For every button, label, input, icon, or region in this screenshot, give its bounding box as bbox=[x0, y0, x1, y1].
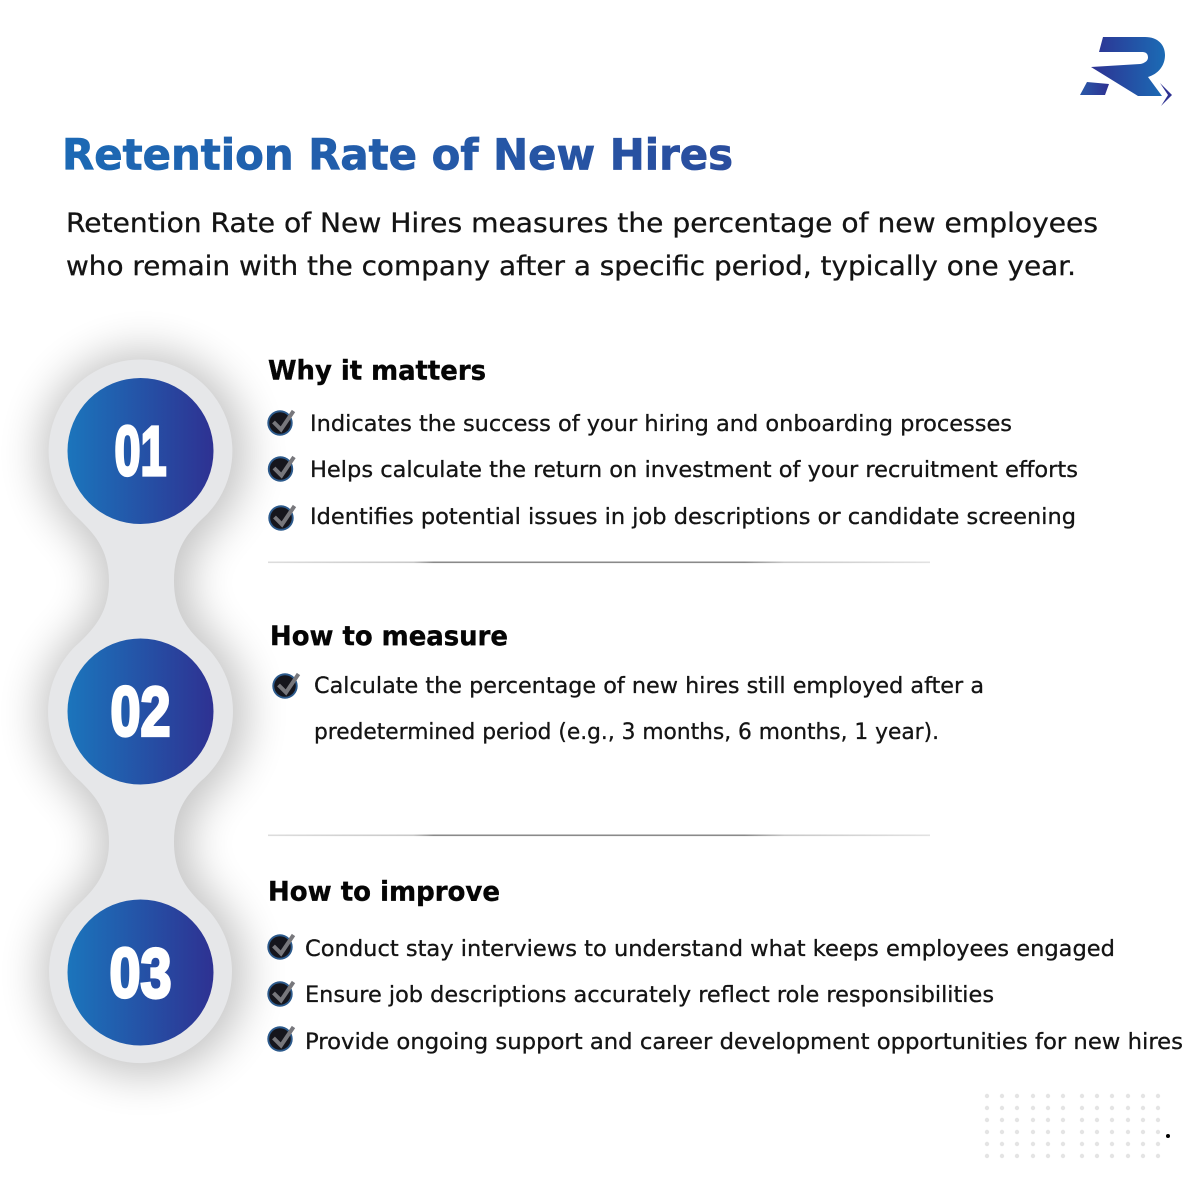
check icon 3 bbox=[268, 505, 294, 531]
numbered timeline bbox=[48, 359, 236, 1065]
list item 3: Provide ongoing support and career development opportunities for new hires bbox=[305, 1029, 1183, 1055]
description: who remain with the company after a specific period, typically one year. bbox=[66, 251, 1076, 282]
badge 02: 02 bbox=[110, 672, 170, 750]
badge 03: 03 bbox=[110, 934, 172, 1012]
list item 2: Ensure job descriptions accurately reflect role responsibilities bbox=[305, 982, 994, 1008]
check icon 1 bbox=[267, 410, 294, 436]
badge 02 bbox=[68, 638, 214, 784]
badge 01: 01 bbox=[114, 412, 166, 490]
check icon 2 bbox=[268, 456, 294, 482]
dot pattern bbox=[985, 1094, 1160, 1158]
heading: how to improve: How to improve bbox=[268, 876, 500, 908]
list item text: predetermined period (e.g., 3 months, 6 months, 1 year). bbox=[314, 719, 939, 745]
section: how to measure bbox=[270, 621, 984, 745]
list item 3: Identifies potential issues in job descriptions or candidate screening bbox=[310, 504, 1076, 530]
heading: how to measure: How to measure bbox=[270, 621, 508, 652]
list item text: Calculate the percentage of new hires still employed after a bbox=[314, 673, 984, 699]
title: Retention Rate of New Hires bbox=[62, 130, 733, 180]
check icon 1 bbox=[267, 934, 294, 960]
list item text bbox=[314, 673, 984, 745]
description: Retention Rate of New Hires measures the percentage of new employees bbox=[66, 208, 1098, 239]
section: why it matters bbox=[267, 356, 1078, 531]
check icon 2 bbox=[267, 981, 294, 1007]
badge 03 bbox=[68, 900, 214, 1046]
list item 1: Indicates the success of your hiring and onboarding processes bbox=[310, 411, 1012, 437]
badge 01 bbox=[68, 378, 214, 524]
list item 1: Conduct stay interviews to understand what keeps employees engaged bbox=[305, 936, 1115, 962]
list item 2: Helps calculate the return on investment of your recruitment efforts bbox=[310, 457, 1078, 483]
logo bbox=[1080, 37, 1172, 106]
description bbox=[66, 208, 1098, 282]
heading: why it matters: Why it matters bbox=[268, 356, 486, 386]
black dot bbox=[1166, 1134, 1170, 1138]
check icon 3 bbox=[267, 1026, 294, 1052]
section: how to improve bbox=[267, 876, 1183, 1055]
check icon bbox=[272, 673, 298, 699]
